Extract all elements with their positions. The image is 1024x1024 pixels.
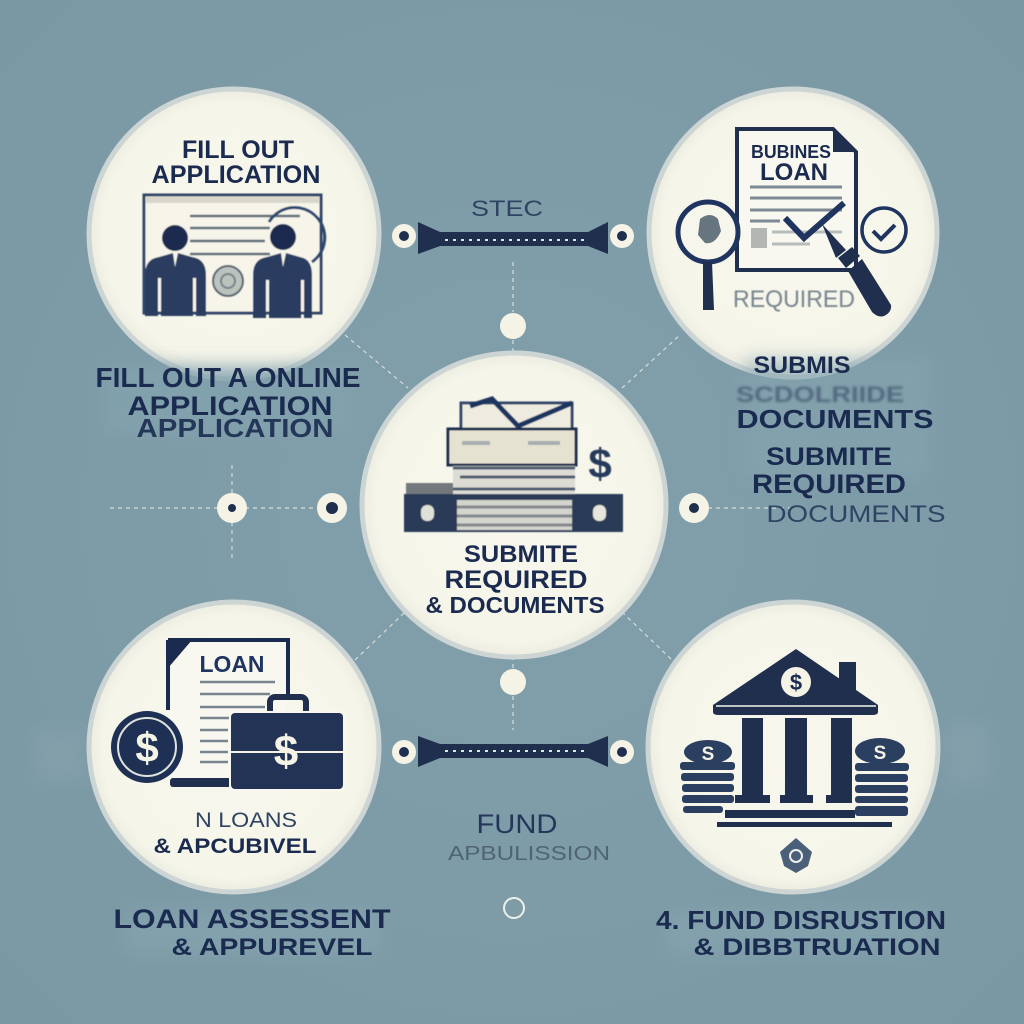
panel: fill out application [89, 89, 379, 379]
label: fund: FUND [476, 809, 558, 839]
backdrop: bottom-left caption [125, 910, 380, 955]
panel: submit required documents center: SUBMITE [464, 541, 578, 568]
backdrop: bottom-right caption [668, 910, 933, 955]
caption: fund distribution: & DIBBTRUATION [694, 934, 940, 961]
panel: submit required documents center: & DOCUMENTS [426, 592, 604, 618]
caption: submit required documents right: REQUIRED [752, 469, 906, 499]
icon: loan document [168, 640, 288, 787]
node: bottom [500, 669, 526, 695]
caption: submit required documents right: SCDOLRIIDE [736, 382, 904, 407]
icon: briefcase [229, 697, 345, 791]
caption: submit required documents right: DOCUMENTS [766, 501, 946, 528]
panel: business loan required [649, 89, 937, 377]
icon: bank with coins [680, 649, 909, 873]
caption: fill out online application [96, 362, 360, 443]
caption: fill out online application: FILL OUT A ONLINE [96, 362, 360, 393]
connector: step top: STEC [471, 196, 543, 221]
backdrop: top-left caption [105, 366, 350, 434]
connector: step top [392, 196, 634, 254]
caption: fund distribution: 4. FUND DISRUSTION [656, 905, 946, 935]
caption: loan assessment and approval: LOAN ASSESSENT [114, 904, 391, 934]
label: approval: APBULISSION [448, 843, 610, 865]
panel: submit required documents center [362, 353, 666, 657]
backdrop: right caption [745, 358, 930, 478]
icon: application form with two people [144, 195, 325, 318]
caption: submit required documents right: SUBMIS [754, 352, 850, 379]
icon: bank with coins: S [702, 744, 714, 765]
caption: submit required documents right: SUBMITE [766, 443, 892, 471]
icon: stack of documents with dollar [404, 399, 623, 532]
node: top [500, 313, 526, 339]
icon: business loan document: BUBINES [751, 142, 831, 162]
icon: magnifier, check and pen [678, 202, 906, 316]
heading: fill out: FILL OUT [182, 136, 294, 164]
caption: fund distribution [656, 905, 946, 961]
icon: business loan document [737, 129, 856, 270]
caption: fill out online application: APPLICATION [128, 391, 332, 421]
connector: bottom [392, 736, 634, 767]
caption: loan assessment and approval: & APPUREVEL [172, 934, 372, 961]
caption: fill out online application: APPLICATION [136, 413, 334, 443]
panel: submit required documents center: REQUIRED [444, 566, 588, 594]
caption: loan assessment and approval [114, 904, 391, 961]
caption: submit required documents right: DOCUMENTS [736, 404, 934, 434]
icon: stack of documents with dollar: $ [588, 440, 612, 487]
caption: submit required documents right [736, 352, 946, 528]
panel: loan assessment [89, 602, 379, 892]
icon: dollar coin [111, 711, 183, 783]
icon: dollar coin: $ [135, 724, 159, 771]
panel: fund distribution [648, 602, 938, 892]
panel: loan assessment: N LOANS [195, 809, 297, 832]
heading: application: APPLICATION [152, 161, 320, 189]
icon: business loan document: LOAN [760, 159, 828, 186]
icon: bank with coins: S [874, 743, 886, 764]
panel: loan assessment: & APCUBIVEL [154, 835, 317, 858]
label: required: REQUIRED [733, 286, 855, 313]
icon: briefcase: $ [274, 727, 298, 776]
icon: bank with coins: $ [790, 670, 802, 695]
node: small outline [504, 898, 524, 918]
nodes: left and right of center [217, 493, 709, 523]
icon: loan document: LOAN [200, 651, 264, 677]
